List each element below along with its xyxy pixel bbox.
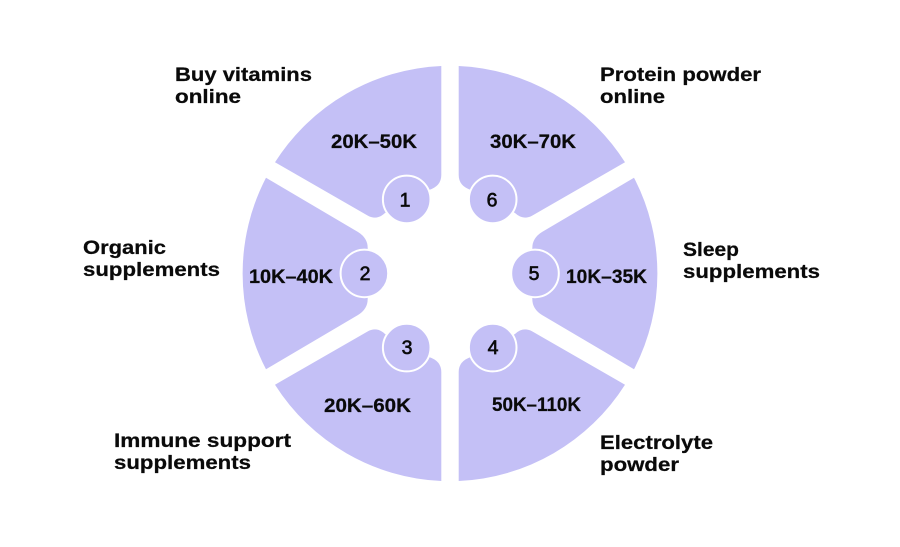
number badge 4 [469, 324, 516, 371]
label: Buy vitamins online [175, 64, 312, 108]
label: Organic supplements: supplements [83, 259, 220, 281]
label: Protein powder online: Protein powder [600, 64, 761, 86]
segment 2: Organic supplements [243, 178, 368, 369]
label: Immune support supplements: Immune support [114, 430, 292, 452]
number badge 6: 6 [487, 190, 497, 212]
segment 3: Immune support supplements: 20K–60K [324, 395, 411, 417]
segment 6: Protein powder online [459, 66, 625, 218]
number badge 1: 1 [400, 190, 410, 212]
label: Protein powder online [600, 64, 761, 108]
segment 1: Buy vitamins online [275, 66, 441, 218]
segment 3: Immune support supplements [275, 329, 441, 481]
segment 6: Protein powder online: 30K–70K [490, 131, 576, 153]
number badge 6 [469, 176, 516, 223]
number badge 4: 4 [488, 337, 499, 359]
label: Buy vitamins online: Buy vitamins [175, 64, 312, 86]
label: Protein powder online: online [600, 86, 665, 108]
segment 5: Sleep supplements [532, 178, 657, 369]
label: Immune support supplements [114, 430, 292, 474]
label: Immune support supplements: supplements [114, 452, 251, 474]
label: Electrolyte powder: Electrolyte [600, 432, 713, 454]
number badge 2 [341, 250, 388, 297]
segment 4: Electrolyte powder: 50K–110K [492, 394, 581, 416]
number badge 5: 5 [529, 263, 540, 285]
label: Buy vitamins online: online [175, 86, 241, 108]
segment 4: Electrolyte powder [459, 329, 625, 481]
label: Organic supplements: Organic [83, 237, 166, 259]
label: Sleep supplements [683, 239, 820, 283]
number badge 2: 2 [360, 263, 370, 285]
label: Electrolyte powder [600, 432, 713, 476]
number badge 3: 3 [402, 337, 412, 359]
segment 5: Sleep supplements: 10K–35K [566, 266, 647, 288]
label: Sleep supplements: Sleep [683, 239, 739, 261]
number badge 5 [511, 250, 559, 297]
number badge 3 [383, 324, 431, 371]
segment 1: Buy vitamins online: 20K–50K [331, 131, 417, 153]
segment 2: Organic supplements: 10K–40K [249, 266, 333, 288]
number badge 1 [383, 176, 431, 223]
label: Electrolyte powder: powder [600, 454, 679, 476]
label: Organic supplements [83, 237, 220, 281]
label: Sleep supplements: supplements [683, 261, 820, 283]
